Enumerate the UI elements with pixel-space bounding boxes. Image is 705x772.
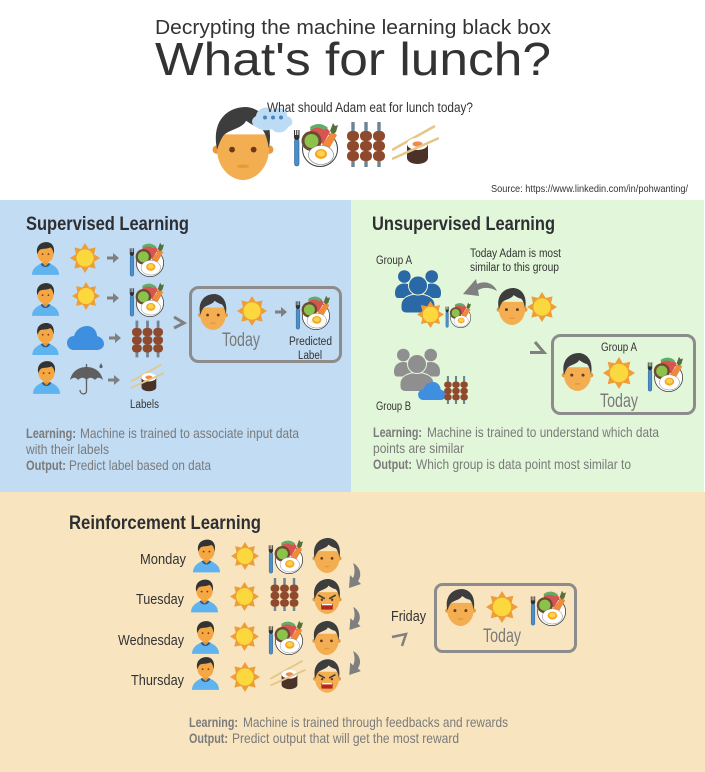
panel: supervised learning xyxy=(0,200,351,492)
description xyxy=(25,425,299,473)
row: Wednesday xyxy=(118,621,341,655)
subtitle: Decrypting the machine learning black box xyxy=(155,17,551,39)
group A label: Group A xyxy=(376,255,412,267)
row: Thursday xyxy=(131,657,341,693)
icon: sushi xyxy=(392,126,439,164)
today prediction box xyxy=(190,288,340,362)
today label: Today xyxy=(600,391,638,412)
description: Output: xyxy=(26,457,66,473)
description xyxy=(373,424,659,472)
icon: thought bubble xyxy=(252,108,292,133)
description: Output: xyxy=(373,456,412,472)
group B label: Group B xyxy=(376,401,411,413)
row: Monday xyxy=(140,538,342,574)
description: Machine is trained to understand which data xyxy=(427,424,659,440)
row: Thursday: Thursday xyxy=(131,672,184,689)
today label: Today xyxy=(222,330,260,351)
similarity note: similar to this group xyxy=(470,262,559,274)
description: Predict output that will get the most reward xyxy=(232,730,459,746)
Friday label: Friday xyxy=(391,608,426,625)
today result box: Group A xyxy=(601,342,637,354)
heading: Supervised Learning xyxy=(26,213,189,235)
arrow to result xyxy=(530,342,544,352)
row: Tuesday: Tuesday xyxy=(136,591,184,608)
description xyxy=(189,714,508,746)
today result box xyxy=(436,584,576,652)
curved arrow to group A xyxy=(463,279,497,296)
question text: What should Adam eat for lunch today? xyxy=(267,100,473,115)
today label: Today xyxy=(483,626,521,647)
icon: skewers xyxy=(347,122,385,167)
Adam today with sun xyxy=(497,288,557,325)
similarity note: Today Adam is most xyxy=(470,248,562,260)
icon: Adam face xyxy=(213,107,273,180)
main title: What's for lunch? xyxy=(155,33,551,85)
icon: group B cluster xyxy=(394,349,468,404)
description: Which group is data point most similar to xyxy=(416,456,631,472)
arrow to prediction xyxy=(174,317,184,328)
description: Output: xyxy=(189,730,228,746)
panel: unsupervised learning xyxy=(351,200,704,492)
predicted label caption: Predicted xyxy=(289,336,332,348)
training rows xyxy=(32,242,164,394)
description: Machine is trained through feedbacks and rewards xyxy=(243,714,508,730)
heading: Reinforcement Learning xyxy=(69,512,261,534)
similarity note xyxy=(470,248,562,274)
header illustration: Adam and lunch options xyxy=(213,100,473,180)
heading: Unsupervised Learning xyxy=(372,213,555,235)
icon: plate xyxy=(294,123,338,166)
description: Learning: xyxy=(189,714,238,730)
arrow to Friday result xyxy=(392,634,406,646)
description: with their labels xyxy=(25,441,109,457)
icon: group A cluster xyxy=(395,270,471,328)
panel: reinforcement learning xyxy=(0,492,705,772)
row: Tuesday xyxy=(136,578,342,614)
curved feedback arrows xyxy=(349,563,361,675)
row: Monday: Monday xyxy=(140,551,186,568)
description: Learning: xyxy=(26,425,76,441)
description: points are similar xyxy=(373,440,464,456)
description: Machine is trained to associate input data xyxy=(80,425,299,441)
description: Learning: xyxy=(373,424,422,440)
row: Wednesday: Wednesday xyxy=(118,632,184,649)
today result box xyxy=(552,336,694,414)
labels caption: Labels xyxy=(130,399,159,411)
description: Predict label based on data xyxy=(69,457,211,473)
title block xyxy=(155,17,551,85)
label caption: Label xyxy=(298,350,322,362)
